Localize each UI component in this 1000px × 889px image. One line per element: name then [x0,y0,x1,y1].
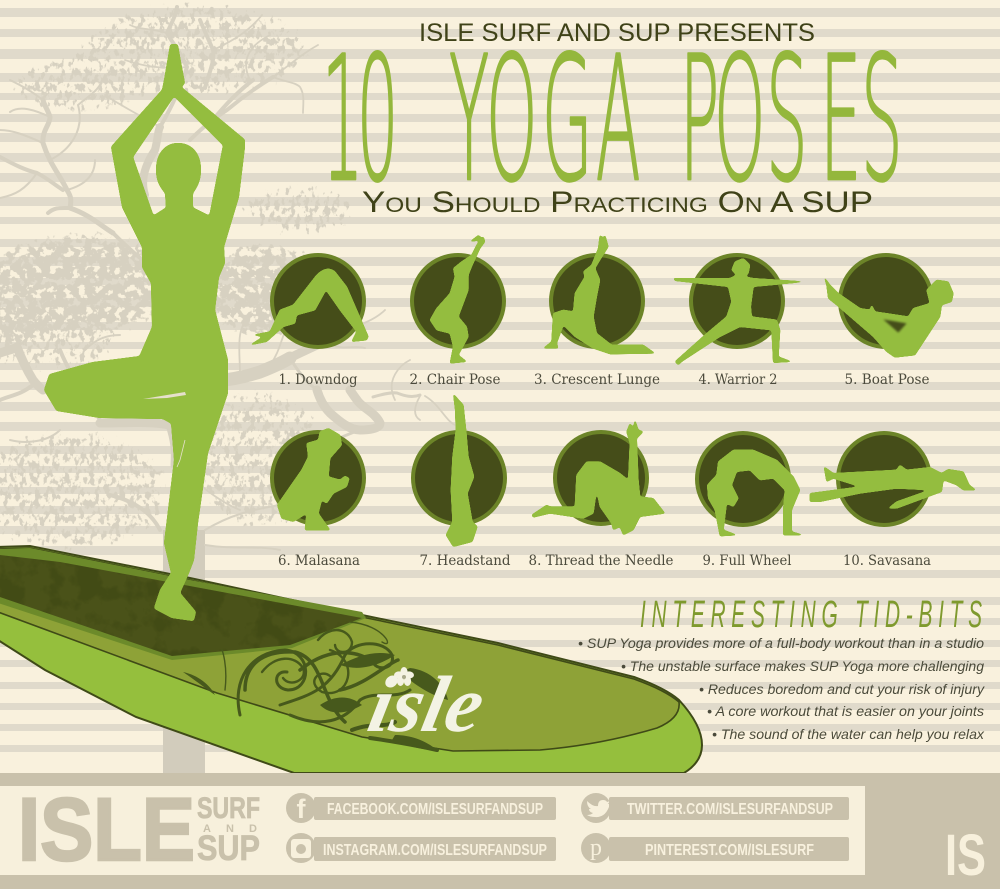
pose 8: thread the needle: 8. Thread the Needle [528,553,674,569]
social: instagram: INSTAGRAM.COM/ISLESURFANDSUP [323,842,547,859]
footer logo: isle surf and sup: AND [203,823,257,835]
isle logo: isle [361,661,492,749]
social: pinterest: PINTEREST.COM/ISLESURF [645,842,814,859]
pose 1: downdog: 1. Downdog [278,372,358,388]
pose 6: malasana: 6. Malasana [278,553,360,569]
pose 1: downdog [250,255,368,388]
board swirl decoration [183,622,448,750]
tid-bits list: • SUP Yoga provides more of a full-body workout than in a studio [578,635,984,651]
tid-bits list: • A core workout that is easier on your joints [707,703,984,719]
pose 9: full wheel: 9. Full Wheel [702,553,792,569]
tid-bits list [578,635,985,742]
pose 7: headstand: 7. Headstand [420,553,511,569]
footer band [0,773,1000,889]
pose 2: chair pose: 2. Chair Pose [410,372,501,388]
pose 7: headstand [413,394,511,569]
social: twitter [581,793,849,823]
tree silhouette [0,0,455,775]
pose 2: chair pose [410,235,504,388]
social: pinterest [581,833,849,863]
pose 5: boat pose: 5. Boat Pose [844,372,930,388]
pose 6: malasana [272,428,364,569]
subtitle: You Should Practicing On A SUP [362,186,873,219]
pose 8: thread the needle [528,420,674,569]
title: presenter line: ISLE SURF AND SUP PRESENTS [419,19,815,47]
pose 5: boat pose [824,255,953,388]
footer logo: isle surf and sup: ISLE [18,779,195,879]
tid-bits list: • The sound of the water can help you relax [712,726,985,742]
social: facebook [286,793,556,824]
tid-bits list: • Reduces boredom and cut your risk of injury [699,681,985,697]
heading: interesting tid-bits: INTERESTING TID-BITS [640,594,982,636]
pose 3: crescent lunge: 3. Crescent Lunge [534,372,660,388]
social: twitter: TWITTER.COM/ISLESURFANDSUP [627,801,833,818]
pose 10: savasana: 10. Savasana [843,553,931,569]
footer corner logo: IS [945,823,986,888]
social: facebook: FACEBOOK.COM/ISLESURFANDSUP [327,801,543,818]
footer logo: isle surf and sup: SURF [197,792,260,825]
pose 4: warrior 2: 4. Warrior 2 [698,372,778,388]
pose 9: full wheel [697,433,803,569]
social: instagram [286,833,556,863]
pose 10: savasana [810,433,976,569]
footer logo: isle surf and sup: SUP [197,829,260,868]
pose 4: warrior 2 [673,255,805,388]
main figure: tree pose [45,45,244,620]
social: facebook: f [296,794,306,824]
paddle board [0,546,702,773]
pose 3: crescent lunge [534,235,660,388]
tid-bits list: • The unstable surface makes SUP Yoga more challenging [621,658,984,674]
title: 10 yoga poses: 10 YOGA POSES [322,19,903,220]
flower [394,667,414,686]
social: pinterest: p [590,835,602,861]
